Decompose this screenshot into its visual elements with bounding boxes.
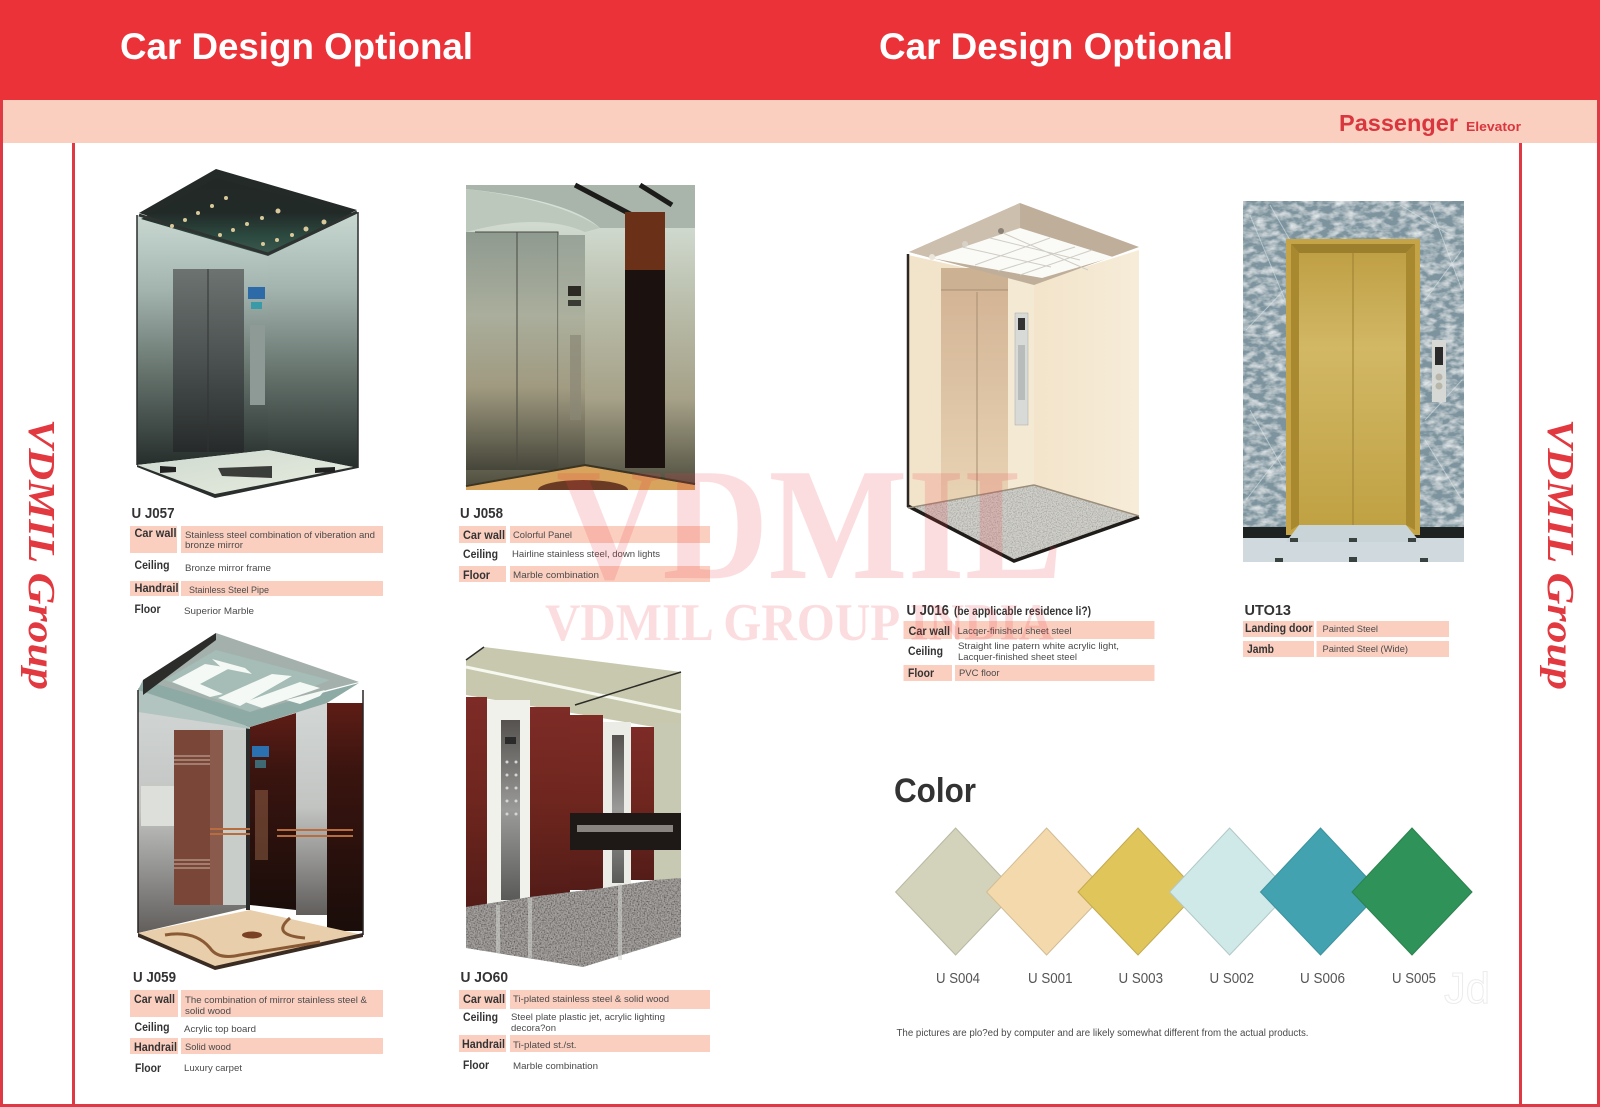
side label left: VDMIL Group bbox=[20, 419, 62, 690]
panel: U JO60 spec table bbox=[459, 970, 710, 1072]
swatch U S003 bbox=[1078, 828, 1198, 955]
panel: U J016 spec table: Ceiling bbox=[908, 646, 943, 658]
panel: UTO13 spec table: Landing door bbox=[1245, 623, 1313, 635]
panel: U J016 spec table: U J016 bbox=[906, 603, 949, 619]
panel: U JO60 spec table: Ti-plated st./st. bbox=[513, 1040, 576, 1051]
swatch code labels bbox=[936, 971, 1436, 987]
panel: U J057 spec table bbox=[130, 506, 383, 617]
panel: U J057 spec table: Superior Marble bbox=[184, 606, 254, 617]
title right: Car Design Optional bbox=[879, 26, 1233, 67]
panel: U J058 spec table: U J058 bbox=[460, 506, 503, 522]
panel: U JO60 spec table: Car wall bbox=[463, 994, 505, 1006]
Jd mark: Jd bbox=[1444, 964, 1490, 1013]
panel: U JO60 spec table: Ceiling bbox=[463, 1012, 498, 1024]
side label right: VDMIL Group bbox=[1539, 419, 1581, 690]
panel: U J057 spec table: Stainless steel combination of viberation and bbox=[185, 530, 375, 541]
watermark: VDMIL GROUP INDIA bbox=[545, 594, 1054, 652]
panel: U J016 spec table bbox=[904, 603, 1154, 681]
passenger elevator label: Elevator bbox=[1466, 119, 1521, 134]
panel: U J057 spec table: U J057 bbox=[132, 506, 174, 522]
swatch code labels: U S006 bbox=[1300, 971, 1345, 987]
panel: U JO60 spec table: decora?on bbox=[511, 1023, 556, 1034]
panel: U J057 spec table: Ceiling bbox=[134, 560, 170, 572]
swatch code labels: U S004 bbox=[936, 971, 980, 987]
panel: U J059 spec table: Handrail bbox=[134, 1042, 177, 1054]
panel: U J058 spec table: Marble combination bbox=[513, 570, 599, 581]
panel: U J057 spec table: Handrail bbox=[134, 583, 178, 595]
swatch code labels: U S005 bbox=[1392, 971, 1436, 987]
panel: landing door UTO13 image bbox=[1243, 201, 1464, 562]
panel: U J057 spec table: Bronze mirror frame bbox=[185, 563, 271, 574]
panel: elevator U JO60 image bbox=[466, 647, 681, 967]
panel: U JO60 spec table: U JO60 bbox=[460, 970, 508, 986]
panel: elevator U J057 image bbox=[137, 169, 358, 498]
panel: U J059 spec table: Floor bbox=[135, 1063, 161, 1075]
panel: UTO13 spec table bbox=[1243, 603, 1449, 657]
panel: U J057 spec table: Floor bbox=[134, 604, 161, 616]
panel: U J059 spec table: Luxury carpet bbox=[184, 1063, 242, 1074]
panel: U JO60 spec table: Steel plate plastic jet, acrylic lighting bbox=[511, 1012, 665, 1023]
title left: Car Design Optional bbox=[120, 26, 473, 67]
swatch U S001 bbox=[987, 828, 1107, 955]
panel: U JO60 spec table: Handrail bbox=[462, 1039, 505, 1051]
panel: U J059 spec table: The combination of mirror stainless steel & bbox=[185, 995, 368, 1006]
panel: U J058 spec table: Floor bbox=[463, 570, 490, 582]
sub-header band bbox=[3, 100, 1597, 143]
panel: U J059 spec table: Ceiling bbox=[134, 1022, 170, 1034]
header banner bbox=[0, 0, 1600, 100]
swatch code labels: U S002 bbox=[1210, 971, 1254, 987]
panel: U J058 spec table: Colorful Panel bbox=[513, 530, 572, 541]
panel: U J057 spec table: bronze mirror bbox=[185, 540, 243, 551]
swatch U S006 bbox=[1260, 828, 1380, 955]
swatch code labels: U S003 bbox=[1118, 971, 1163, 987]
swatch U S005 bbox=[1352, 828, 1472, 955]
panel: U J059 spec table: Car wall bbox=[134, 994, 175, 1006]
panel: U J058 spec table: Hairline stainless steel, down lights bbox=[512, 549, 660, 560]
swatch code labels: U S001 bbox=[1028, 971, 1072, 987]
panel: U J059 spec table: solid wood bbox=[185, 1006, 231, 1017]
panel: U J059 spec table: Solid wood bbox=[185, 1042, 231, 1053]
panel: UTO13 spec table: Painted Steel (Wide) bbox=[1322, 644, 1408, 655]
panel: UTO13 spec table: UTO13 bbox=[1244, 603, 1291, 619]
panel: U J057 spec table: Car wall bbox=[134, 528, 176, 540]
disclaimer note: The pictures are plo?ed by computer and are likely somewhat different from the actual products. bbox=[896, 1028, 1308, 1039]
heading: Color: Color bbox=[894, 772, 976, 810]
passenger elevator label bbox=[1339, 110, 1521, 136]
panel: elevator U J058 image bbox=[466, 185, 695, 502]
panel: U J016 spec table: PVC floor bbox=[959, 668, 1000, 679]
panel: U J057 spec table: Stainless Steel Pipe bbox=[189, 585, 269, 596]
panel: elevator U J059 image bbox=[138, 633, 363, 970]
panel: U J016 spec table: Lacqer-finished sheet steel bbox=[958, 626, 1072, 637]
panel: U J058 spec table bbox=[459, 506, 710, 582]
panel: U J016 spec table: Car wall bbox=[908, 626, 950, 638]
panel: U JO60 spec table: Marble combination bbox=[513, 1061, 598, 1072]
panel: UTO13 spec table: Painted Steel bbox=[1322, 624, 1378, 635]
passenger elevator label: Passenger bbox=[1339, 110, 1458, 136]
panel: U J016 spec table: Straight line patern white acrylic light, bbox=[958, 641, 1119, 652]
panel: U J016 spec table: Floor bbox=[908, 668, 934, 680]
panel: U J016 spec table: Lacquer-finished sheet steel bbox=[958, 652, 1077, 663]
panel: U J016 spec table: (be applicable residence li?) bbox=[954, 606, 1091, 618]
panel: U J058 spec table: Ceiling bbox=[463, 549, 498, 561]
panel: U J058 spec table: Car wall bbox=[463, 530, 505, 542]
panel: color swatches bbox=[896, 828, 1472, 955]
panel: UTO13 spec table: Jamb bbox=[1247, 644, 1274, 656]
panel: U JO60 spec table: Floor bbox=[463, 1060, 489, 1072]
watermark: VDMIL bbox=[556, 435, 1063, 613]
swatch U S002 bbox=[1170, 828, 1290, 955]
panel: U J059 spec table bbox=[130, 970, 383, 1075]
panel: elevator U J016 image bbox=[908, 203, 1139, 563]
panel: U J059 spec table: U J059 bbox=[133, 970, 176, 986]
panel: U JO60 spec table: Ti-plated stainless steel & solid wood bbox=[513, 994, 669, 1005]
panel: U J059 spec table: Acrylic top board bbox=[184, 1024, 256, 1035]
swatch U S004 bbox=[896, 828, 1016, 955]
